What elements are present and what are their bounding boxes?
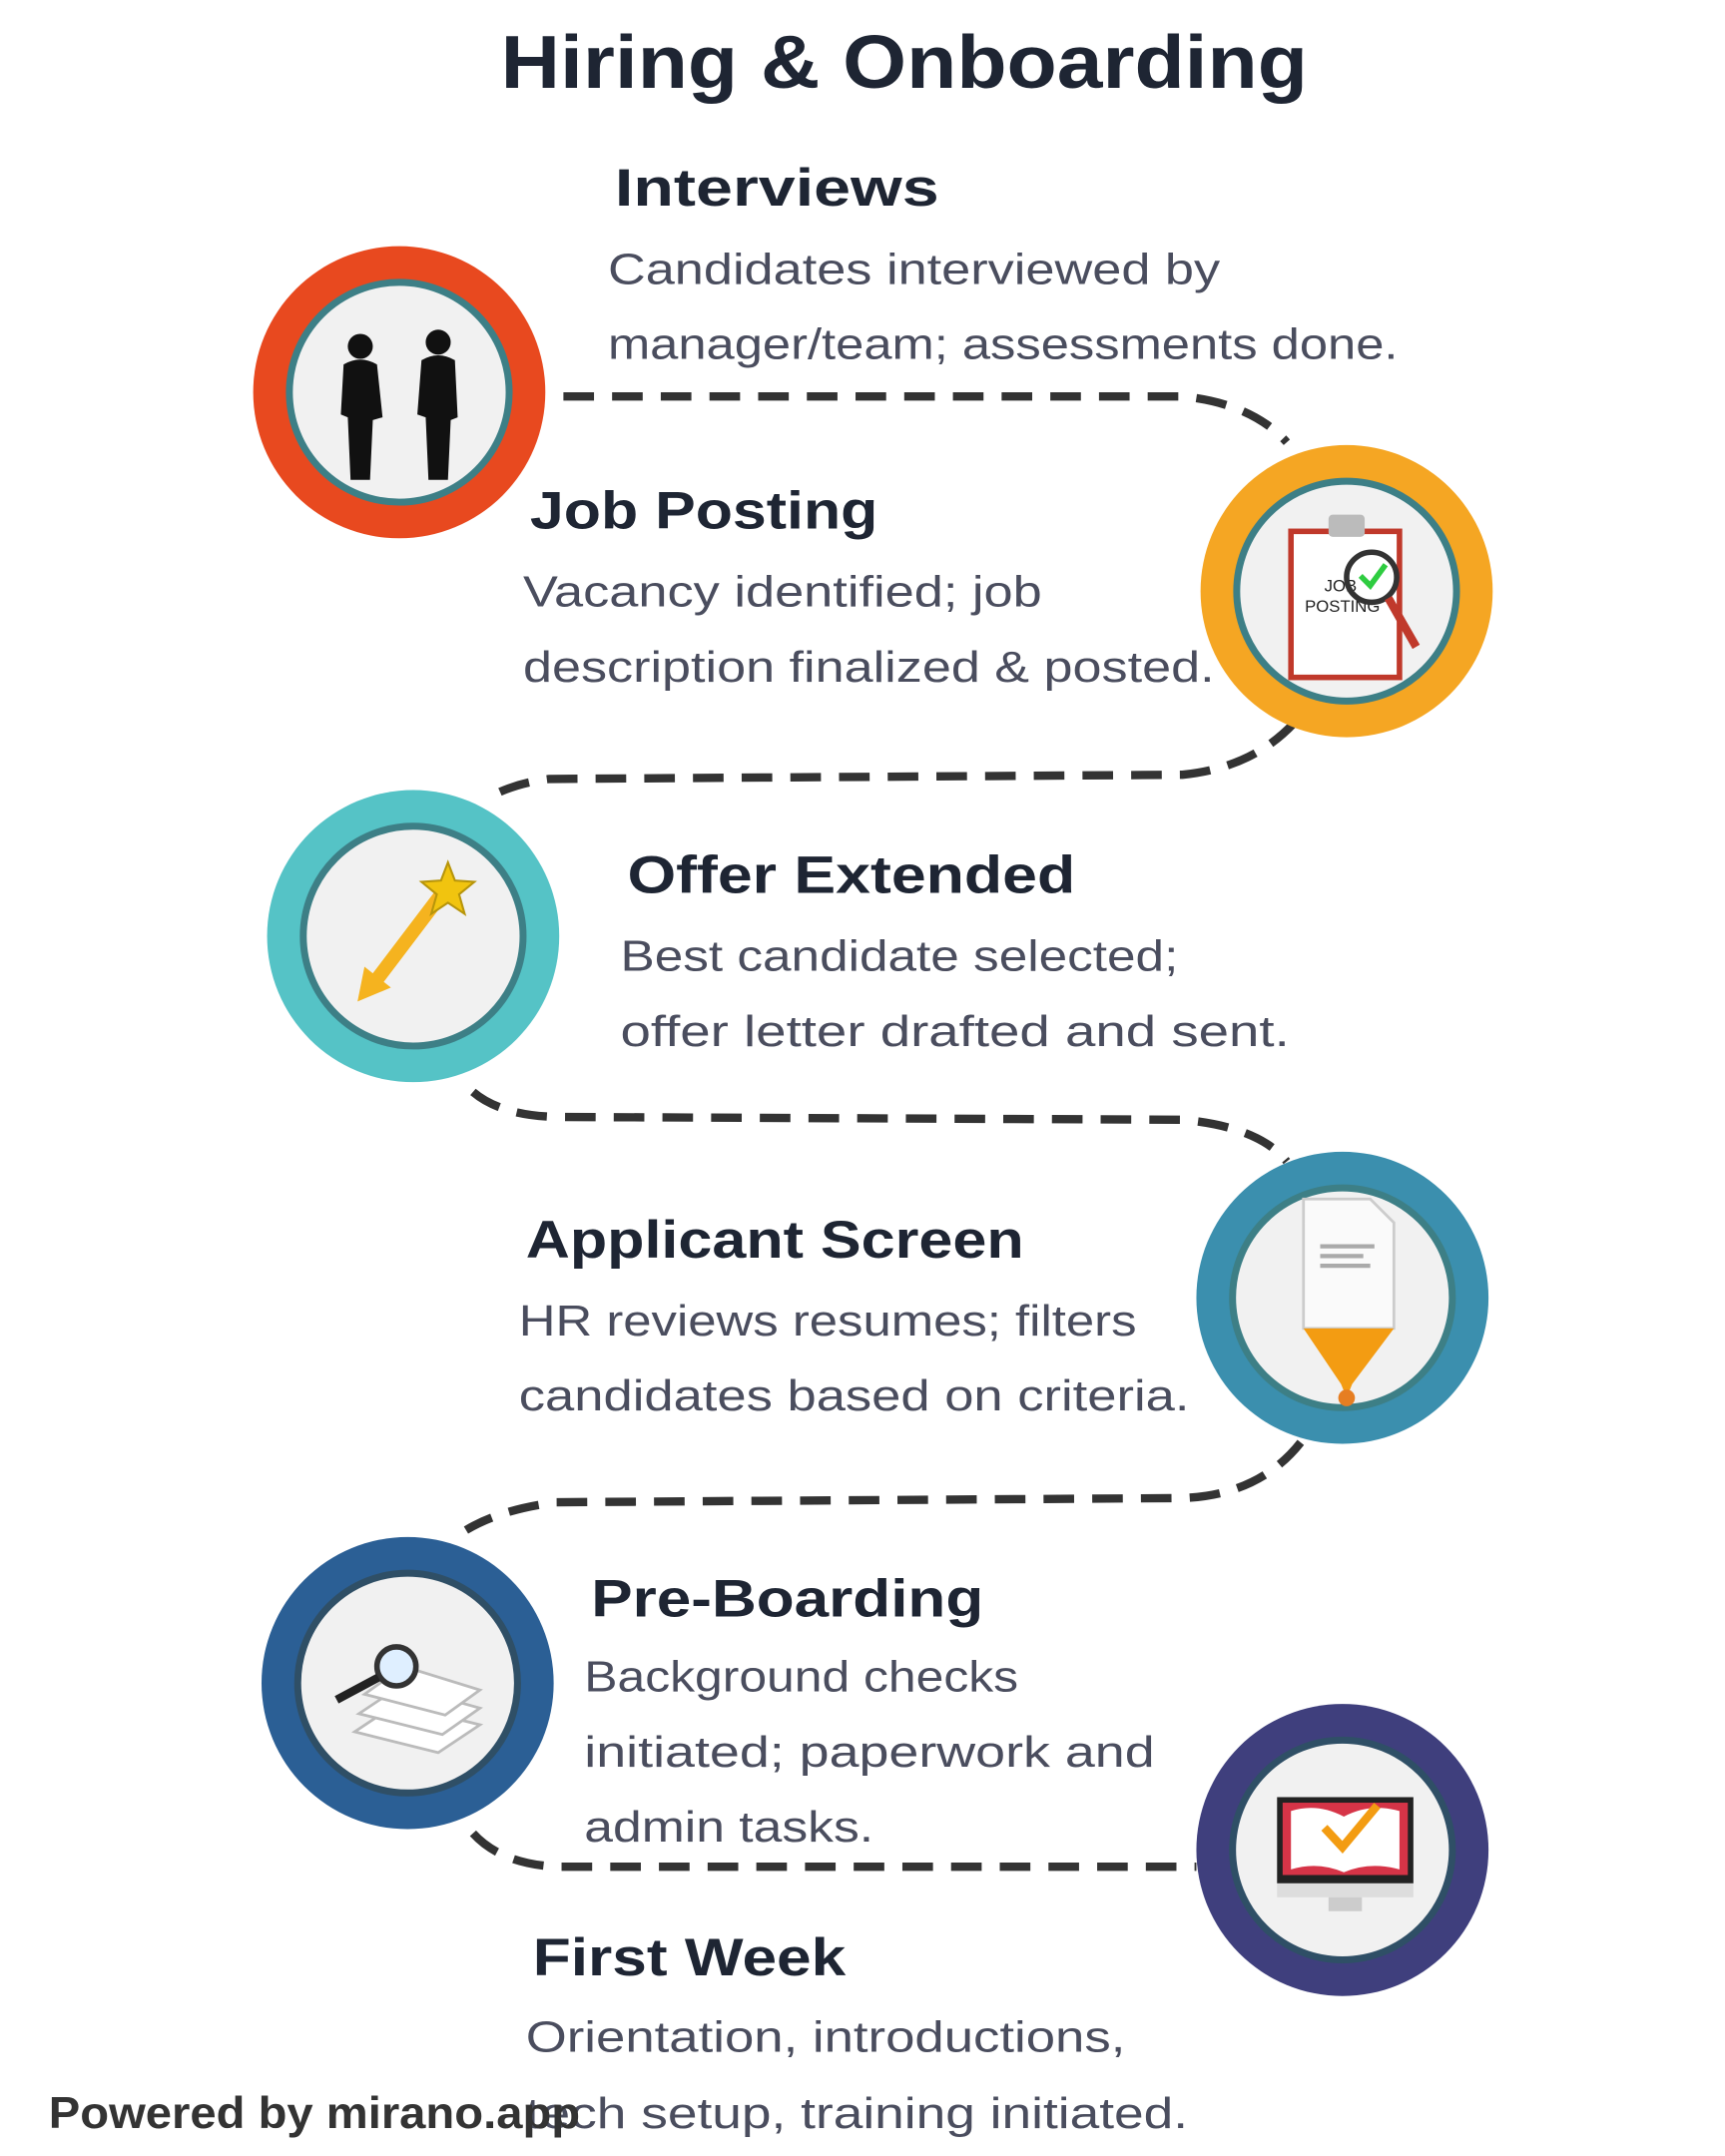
text: applicant screen: Applicant Screen xyxy=(526,1211,1024,1270)
icon: first week circle xyxy=(1196,1704,1488,1996)
icon: offer circle xyxy=(268,791,559,1082)
text: pre-boarding: Pre-Boarding xyxy=(591,1569,983,1628)
text: interviews xyxy=(608,159,1399,369)
text: applicant screen: candidates based on criteria. xyxy=(519,1372,1189,1420)
text: pre-boarding: Background checks xyxy=(584,1654,1018,1702)
text: interviews: manager/team; assessments done. xyxy=(608,321,1399,369)
text: pre-boarding: admin tasks. xyxy=(584,1804,873,1852)
text: offer extended: Best candidate selected; xyxy=(621,933,1178,981)
icon: applicant screen circle xyxy=(1196,1152,1488,1444)
text: first week: First Week xyxy=(533,1928,847,1987)
icon: job posting circle xyxy=(1201,445,1492,738)
text: interviews: Interviews xyxy=(615,159,939,218)
icon: pre-boarding circle xyxy=(262,1537,554,1830)
text: offer extended: Offer Extended xyxy=(627,846,1075,905)
text: first week xyxy=(526,1928,1188,2138)
text: interviews: Candidates interviewed by xyxy=(608,246,1221,293)
text: job posting xyxy=(523,482,1215,692)
text: first week: Orientation, introductions, xyxy=(526,2013,1125,2061)
title: Hiring & Onboarding xyxy=(501,20,1308,104)
text: pre-boarding xyxy=(584,1569,1155,1852)
icon: job posting circle: POSTING xyxy=(1305,597,1380,616)
dashed connector path xyxy=(466,396,1301,1867)
footer: powered by: Powered by mirano.app xyxy=(49,2089,580,2138)
text: offer extended: offer letter drafted and sent. xyxy=(621,1008,1290,1056)
text: offer extended xyxy=(621,846,1290,1056)
text: applicant screen xyxy=(519,1211,1189,1420)
icon: interviews circle xyxy=(254,247,545,538)
text: job posting: Job Posting xyxy=(530,482,877,541)
icon: job posting circle: JOB xyxy=(1325,576,1357,595)
text: pre-boarding: initiated; paperwork and xyxy=(584,1729,1155,1777)
text: first week: tech setup, training initiated. xyxy=(526,2090,1188,2138)
text: job posting: Vacancy identified; job xyxy=(523,569,1042,617)
text: job posting: description finalized & posted. xyxy=(523,644,1215,692)
text: applicant screen: HR reviews resumes; filters xyxy=(519,1298,1137,1346)
